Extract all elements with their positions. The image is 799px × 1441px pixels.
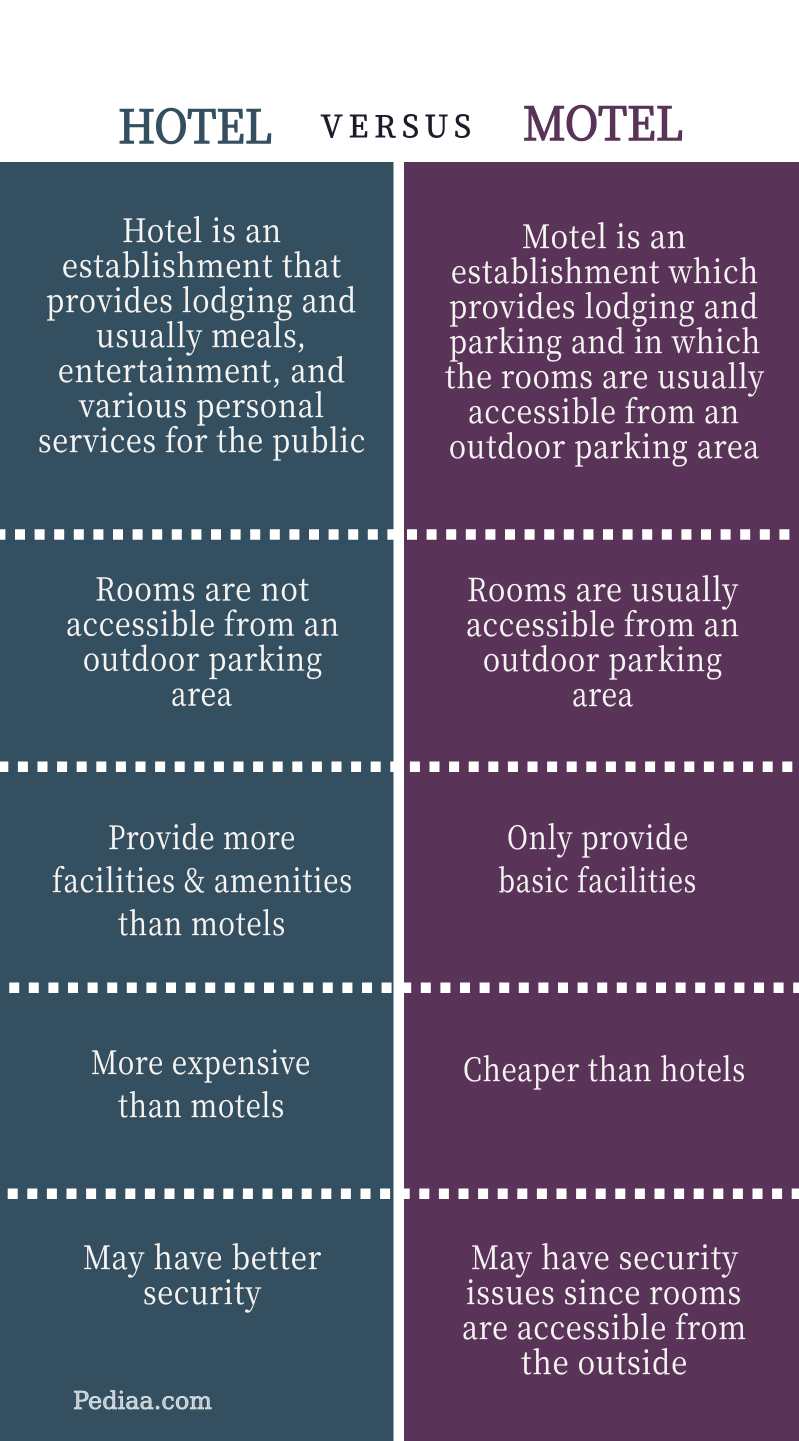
title: MOTEL: MOTEL xyxy=(523,88,683,154)
motel definition text xyxy=(445,212,765,468)
hotel room access text xyxy=(66,564,340,716)
motel room access text: accessible from an xyxy=(466,600,740,646)
motel security text: May have security xyxy=(471,1233,739,1279)
motel room access text xyxy=(466,565,740,716)
motel definition text: the rooms are usually xyxy=(445,352,765,398)
hotel facilities text: Provide more xyxy=(108,813,296,859)
motel room access text: Rooms are usually xyxy=(467,565,739,611)
motel definition text: Motel is an xyxy=(522,212,687,258)
motel price text: Cheaper than hotels xyxy=(463,1045,746,1091)
panel: motel column background xyxy=(404,162,799,1441)
hotel price text xyxy=(91,1038,311,1127)
motel facilities text xyxy=(498,813,697,902)
motel facilities text: basic facilities xyxy=(498,856,697,902)
hotel room access text: accessible from an xyxy=(66,600,340,646)
motel security text: issues since rooms xyxy=(466,1268,742,1314)
motel definition text: outdoor parking area xyxy=(449,422,760,468)
motel room access text: area xyxy=(572,670,634,716)
motel definition text: accessible from an xyxy=(468,387,740,433)
hotel definition text: usually meals, xyxy=(96,311,307,357)
hotel definition text xyxy=(38,206,366,462)
title: VERSUS: VERSUS xyxy=(321,102,471,146)
hotel facilities text: than motels xyxy=(118,899,286,945)
motel facilities text: Only provide xyxy=(507,813,689,859)
hotel room access text: Rooms are not xyxy=(95,564,310,610)
hotel security text: security xyxy=(143,1268,262,1314)
hotel facilities text: facilities & amenities xyxy=(52,856,353,902)
hotel price text: More expensive xyxy=(91,1038,311,1084)
hotel definition text: Hotel is an xyxy=(122,206,282,252)
logo: Pediaa.com: Pediaa.com xyxy=(73,1387,212,1415)
title: HOTEL: HOTEL xyxy=(118,91,272,157)
hotel room access text: outdoor parking xyxy=(83,634,323,680)
hotel definition text: provides lodging and xyxy=(46,276,357,322)
panel: hotel column background xyxy=(0,162,394,1441)
hotel facilities text xyxy=(52,813,353,945)
motel definition text: parking and in which xyxy=(449,317,761,363)
motel definition text: establishment which xyxy=(451,247,759,293)
motel definition text: provides lodging and xyxy=(449,282,759,328)
hotel definition text: services for the public xyxy=(38,416,366,462)
motel security text: the outside xyxy=(521,1338,688,1384)
hotel definition text: various personal xyxy=(78,381,325,427)
hotel security text: May have better xyxy=(83,1233,322,1279)
hotel price text: than motels xyxy=(118,1081,285,1127)
hotel definition text: establishment that xyxy=(62,241,342,287)
motel room access text: outdoor parking xyxy=(483,635,723,681)
hotel definition text: entertainment, and xyxy=(58,346,346,392)
hotel room access text: area xyxy=(171,670,233,716)
hotel security text xyxy=(83,1233,322,1314)
motel security text xyxy=(462,1233,747,1384)
motel security text: are accessible from xyxy=(462,1303,747,1349)
